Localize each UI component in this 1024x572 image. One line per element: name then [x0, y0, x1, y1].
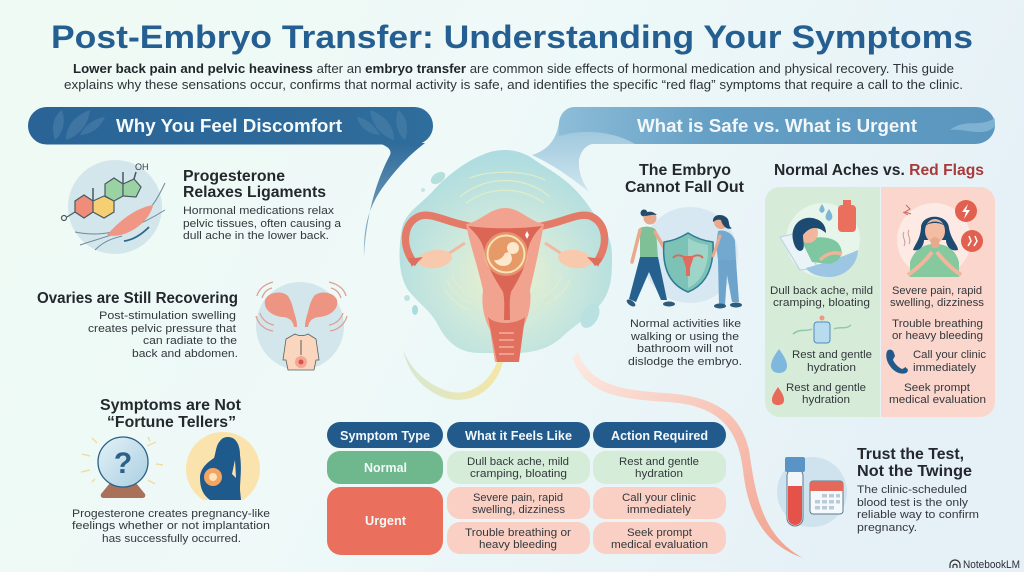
embryo body: bathroom will not: [637, 343, 734, 355]
panel: red flags: immediately: [913, 362, 976, 374]
left section banner: Why You Feel Discomfort: [116, 116, 342, 136]
trust heading: [857, 446, 972, 480]
ovaries: [417, 248, 453, 270]
symptoms body: [72, 508, 270, 545]
normal text: [770, 285, 873, 309]
panel: red flags: [881, 187, 995, 417]
central uterus illustration: [400, 150, 612, 362]
row: urgent: Urgent: [365, 514, 407, 528]
panel: normal aches: hydration: [807, 362, 856, 374]
panel: normal aches: Rest and gentle: [792, 349, 872, 361]
fallopian tubes: [405, 215, 474, 260]
trust body: pregnancy.: [857, 522, 917, 534]
ovaries body: back and abdomen.: [132, 348, 238, 360]
panel: red flags: Seek prompt: [904, 382, 971, 394]
ligaments: [445, 243, 565, 256]
panel: normal aches: Rest and gentle: [786, 382, 866, 394]
row: normal: hydration: [635, 468, 683, 480]
row: normal: Normal: [364, 461, 407, 475]
progesterone body: [183, 205, 342, 242]
progesterone body: pelvic tissues, often causing a: [183, 218, 342, 230]
crystal ball icon: [81, 437, 163, 498]
symptoms heading: “Fortune Tellers”: [107, 414, 236, 431]
symptom table: [327, 422, 726, 555]
red flags text: [890, 285, 984, 342]
symptoms heading: Symptoms are Not: [100, 397, 241, 414]
uterus body: [466, 208, 544, 362]
red flags text: swelling, dizziness: [890, 297, 984, 309]
embryo body: dislodge the embryo.: [628, 356, 742, 368]
panel: red flags: Call your clinic: [913, 349, 986, 361]
row: urgent: medical evaluation: [611, 539, 708, 551]
row: normal: cramping, bloating: [470, 468, 567, 480]
ovaries icon: [256, 282, 347, 370]
progesterone heading: Progesterone: [183, 168, 285, 185]
ovaries heading: Ovaries are Still Recovering: [37, 290, 238, 307]
symptoms body: feelings whether or not implantation: [72, 520, 270, 532]
table headers: [327, 422, 726, 448]
row: urgent: Trouble breathing or: [465, 527, 571, 539]
table headers: What it Feels Like: [465, 429, 572, 443]
icon: phone: [886, 350, 908, 374]
trust body: The clinic-scheduled: [857, 484, 967, 496]
icon: distressed woman: [897, 200, 983, 277]
intro paragraph: explains why these sensations occur, confirms that normal activity is safe, and identifies the specific “red flag” symptoms that require a call to the clinic.: [64, 77, 963, 92]
pink ribbon to test section: [572, 352, 803, 558]
table headers: Symptom Type: [340, 429, 430, 443]
right section banner: What is Safe vs. What is Urgent: [637, 116, 917, 136]
panel: normal aches: hydration: [802, 394, 850, 406]
row: urgent: [327, 487, 726, 555]
ovaries body: creates pelvic pressure that: [88, 323, 237, 335]
embryo body: [628, 318, 742, 368]
progesterone heading: [183, 168, 326, 201]
row: urgent: swelling, dizziness: [472, 504, 565, 516]
table headers: Action Required: [611, 429, 708, 443]
shield: [664, 233, 713, 292]
embryo heading: [625, 162, 744, 196]
row: normal: [327, 451, 726, 484]
pregnancy silhouette icon: [186, 432, 260, 500]
trust body: reliable way to confirm: [857, 509, 979, 521]
progesterone icon: [62, 160, 165, 254]
progesterone body: Hormonal medications relax: [183, 205, 334, 217]
icon: red drop: [772, 387, 784, 405]
left section banner: [28, 107, 433, 257]
embryo body: walking or using the: [630, 331, 739, 343]
NotebookLM badge: NotebookLM: [963, 559, 1020, 571]
icon: resting woman: [780, 200, 860, 277]
trust body: blood test is the only: [857, 497, 968, 509]
panel: normal aches: [765, 187, 880, 417]
panel: red flags: medical evaluation: [889, 394, 986, 406]
icon: water bottle: [793, 316, 851, 343]
progesterone body: dull ache in the lower back.: [183, 230, 329, 242]
symptoms heading: [100, 397, 241, 431]
right woman: [713, 215, 742, 308]
crystal ball icon: ?: [114, 447, 132, 480]
right section banner: [532, 107, 995, 192]
row: urgent: heavy bleeding: [479, 539, 557, 551]
row: urgent: immediately: [627, 504, 691, 516]
ovaries body: Post-stimulation swelling: [99, 310, 236, 322]
embryo heading: Cannot Fall Out: [625, 179, 744, 196]
row: normal: Rest and gentle: [619, 456, 699, 468]
symptoms body: has successfully occurred.: [102, 533, 241, 545]
row: urgent: Call your clinic: [622, 492, 696, 504]
red flags text: Severe pain, rapid: [892, 285, 982, 297]
red flags text: or heavy bleeding: [892, 330, 983, 342]
row: urgent: Severe pain, rapid: [473, 492, 563, 504]
background blob: [400, 150, 612, 353]
normal vs red flags heading: Normal Aches vs. Red Flags: [774, 162, 984, 179]
red flags text: Trouble breathing: [892, 318, 983, 330]
normal text: cramping, bloating: [773, 297, 870, 309]
ovaries body: [88, 310, 238, 360]
left woman: [625, 210, 675, 308]
cervix: [488, 317, 525, 362]
embryo heading: The Embryo: [639, 162, 731, 179]
embryo body: Normal activities like: [630, 318, 741, 330]
trust body: [857, 484, 979, 534]
normal text: Dull back ache, mild: [770, 285, 873, 297]
embryo: [484, 232, 528, 276]
ovaries body: can radiate to the: [143, 335, 237, 347]
progesterone icon: OH: [135, 162, 148, 172]
row: urgent: Seek prompt: [627, 527, 693, 539]
trust heading: Not the Twinge: [857, 463, 972, 480]
yellow ribbon: [403, 350, 503, 400]
icon: blue drop: [771, 349, 787, 373]
blood test and calendar icon: [777, 457, 847, 527]
symptoms body: Progesterone creates pregnancy-like: [72, 508, 270, 520]
trust heading: Trust the Test,: [857, 446, 964, 463]
progesterone heading: Relaxes Ligaments: [183, 184, 326, 201]
intro paragraph: [64, 61, 963, 92]
intro paragraph: Lower back pain and pelvic heaviness after an embryo transfer are common side effects of hormonal medication and physical recovery. This guide: [73, 61, 954, 76]
walking women and shield icon: [625, 207, 742, 308]
row: normal: Dull back ache, mild: [467, 456, 569, 468]
title: Post-Embryo Transfer: Understanding Your Symptoms: [51, 19, 973, 55]
